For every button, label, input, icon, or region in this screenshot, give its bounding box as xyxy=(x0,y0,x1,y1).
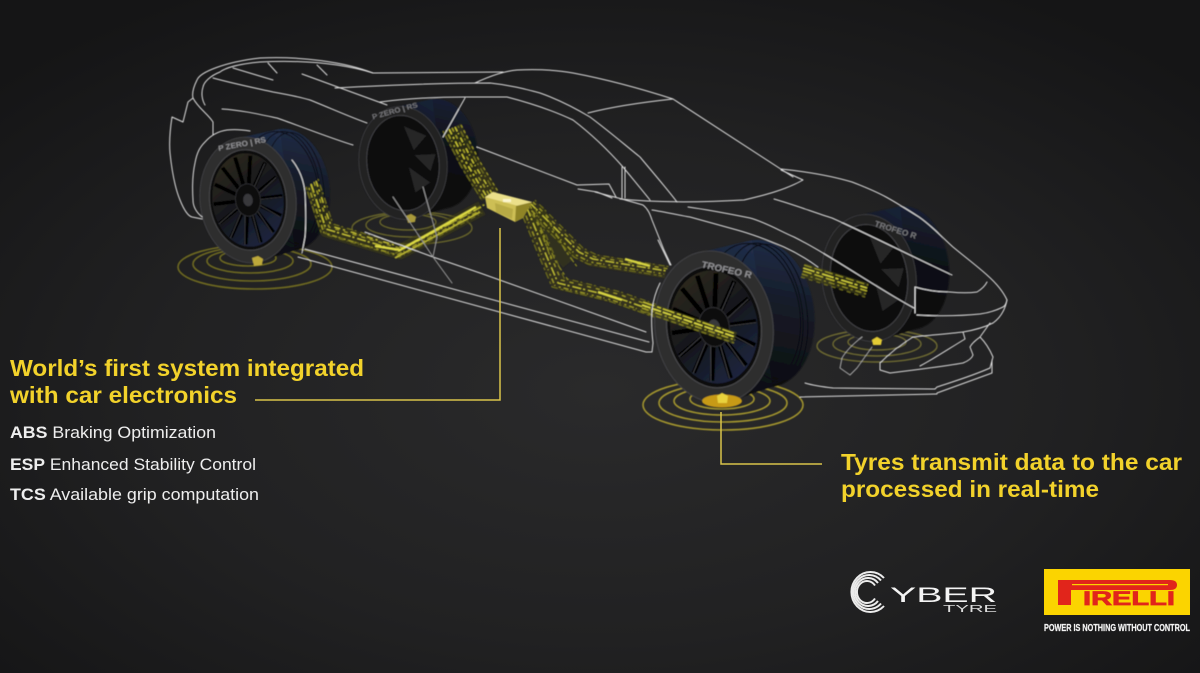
data streams: front axle xyxy=(521,200,706,331)
signal rings: left rear tyre xyxy=(178,245,332,289)
sensors xyxy=(252,214,882,408)
logo: Pirelli: P xyxy=(1057,574,1072,613)
tyre: rear far: P ZERO | RS xyxy=(371,101,419,121)
signal rings: right rear tyre xyxy=(352,212,472,244)
feature list: TCS Available grip computation xyxy=(10,486,259,504)
logo: Cyber Tyre: YBER xyxy=(890,584,997,607)
data streams: rear axle xyxy=(306,125,499,258)
tyre: rear near xyxy=(192,124,338,268)
tyre: front far xyxy=(814,201,957,347)
logo: Cyber Tyre: TYRE xyxy=(943,604,998,615)
heading: car electronics: World’s first system integrated xyxy=(10,355,364,381)
heading: car electronics: with car electronics xyxy=(9,382,237,408)
tyre: rear near: P ZERO | RS xyxy=(217,135,267,153)
signal rings: front far tyre xyxy=(817,330,937,362)
signal rings: front near tyre xyxy=(643,380,803,430)
leader line: tyre data xyxy=(721,412,822,464)
logo: Pirelli: IRELLI xyxy=(1083,589,1175,610)
tyre: front near xyxy=(644,233,825,411)
heading: tyre data: processed in real-time xyxy=(841,476,1099,502)
leader line: car electronics xyxy=(255,228,500,400)
car illustration xyxy=(170,58,1007,430)
heading: car electronics xyxy=(9,355,364,408)
heading: tyre data: Tyres transmit data to the car xyxy=(841,449,1182,475)
feature list: ESP Enhanced Stability Control xyxy=(10,456,256,474)
logo: Cyber Tyre xyxy=(851,572,998,615)
feature list xyxy=(10,424,259,504)
logo: Pirelli xyxy=(1044,569,1190,634)
tyre: front far: TROFEO R xyxy=(873,219,918,241)
car outline xyxy=(170,58,1007,397)
tyre: front near: TROFEO R xyxy=(700,260,753,281)
tyre: rear far xyxy=(352,94,485,225)
control unit xyxy=(485,192,532,222)
heading: tyre data xyxy=(841,449,1182,502)
feature list: ABS Braking Optimization xyxy=(10,424,216,442)
data streams over wheels xyxy=(641,265,868,343)
